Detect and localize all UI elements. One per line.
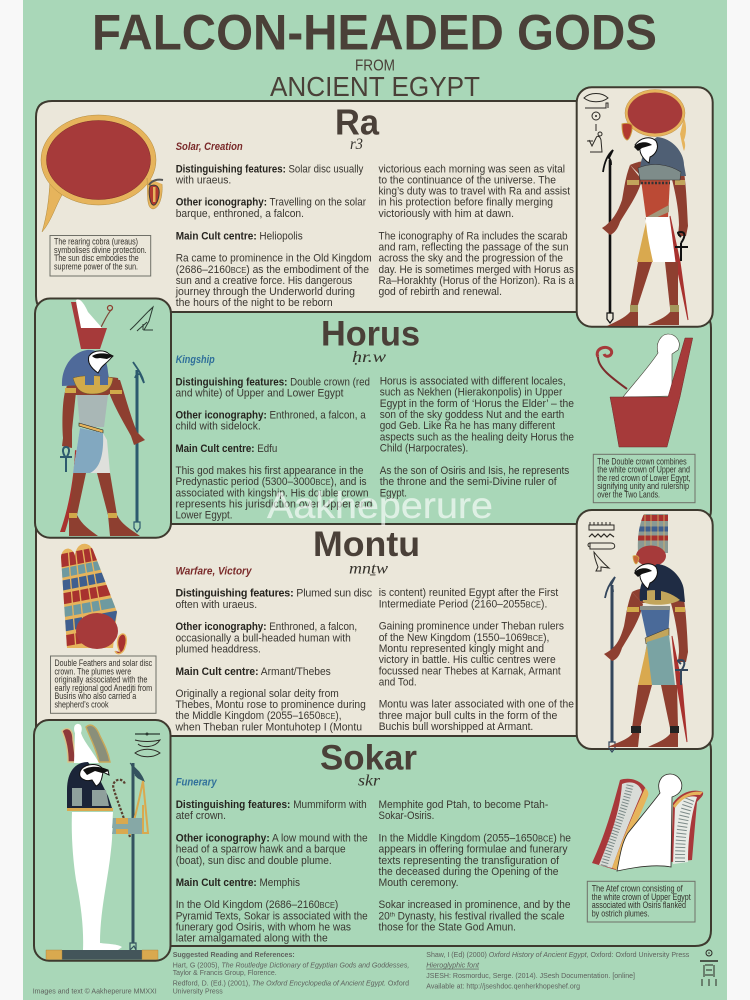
text: Montu left column: occasionally a bull-headed human with [176,632,351,644]
references: Redford, D. (Ed.) (2001), The Oxford Encyclopedia of Ancient Egypt. Oxford [173,979,409,988]
text: Ra left column: (2686–2160BCE) as the embodiment of the [176,264,369,276]
text: Sokar left column: Other iconography: A low mound with the [176,832,368,844]
tag: Kingship: Kingship [176,354,215,366]
references: Suggested Reading and References: [173,950,295,959]
text: Montu left column: often with uraeus. [176,599,257,611]
text: Ra right column: The iconography of Ra includes the scarab [378,230,568,242]
text: Horus right column [380,375,574,499]
title [92,4,657,102]
references: Hart, G (2005), The Routledge Dictionary of Egyptian Gods and Goddesses, [173,961,409,970]
tag: Funerary: Funerary [176,777,217,789]
text: Montu left column: Main Cult centre: Armant/Thebes [176,666,331,678]
hieroglyph: Horus falcon [130,307,153,331]
text: Sokar left column: (boat), sun disc and double plume. [176,855,332,867]
tag: Warfare, Victory: Warfare, Victory [176,565,252,577]
caption: Ra: The rearing cobra (ureaus) [54,237,138,247]
caption: Ra: symbolises divine protection. [54,245,147,255]
transliteration: Sokar: skr [358,773,381,790]
text: Ra right column [378,163,574,298]
text: Montu right column: victory in battle. His cultic centres were [379,654,556,666]
illustration: sun disc with uraeus [41,115,163,232]
text: Ra right column: and ram, reflecting the passage of the sun [378,242,569,254]
title: FALCON-HEADED GODS [92,4,657,60]
text: Sokar left column: funerary god Osiris, with whom he was [176,922,351,934]
illustration: atef crown [592,774,703,871]
figure: Montu [604,512,688,752]
caption: Ra: The sun disc embodies the [54,253,139,263]
text: Horus left column [176,376,373,522]
text: Montu right column: and Tod. [379,676,417,688]
caption: Ra: supreme power of the sun. [54,261,138,271]
references: Taylor & Francis Group, Florence. [173,968,277,977]
text: Montu right column: Montu was later associated with one of the [379,699,574,711]
text: Sokar left column: later amalgamated along with the [176,933,328,945]
text: Horus right column: son of the sky goddess Nut and the earth [380,409,564,421]
title: FROM [355,58,395,74]
text: Montu right column: Gaining prominence under Theban rulers [379,621,564,633]
transliteration: Ra: r3 [350,136,363,153]
text: Horus left column: represents his jurisdiction over Upper and [176,498,373,510]
text: Sokar left column: atef crown. [176,810,226,822]
text: Sokar right column: Sokar-Osiris. [378,810,434,822]
panel: Ra [36,101,600,312]
references: Shaw, I (Ed) (2000) Oxford History of Ancient Egypt, Oxford: Oxford University Press [426,950,690,959]
figure: Sokar [46,724,158,960]
text: Montu left column: Other iconography: Enthroned, a falcon, [176,621,357,633]
caption: Montu: Double Feathers and solar disc [54,658,153,668]
caption: Horus: the white crown of Upper and [597,465,690,475]
text: Horus right column: As the son of Osiris and Isis, he represents [380,465,569,477]
text: Montu left column: plumed headdress. [176,644,261,656]
figure: Horus [60,299,145,536]
text: Horus left column: This god makes his first appearance in the [176,465,364,477]
caption: Horus: the red crown of Lower Egypt, [597,473,691,483]
text: Ra right column: victorious each morning was seen as vital [378,163,565,175]
text: Sokar right column: those for the State God Amun. [378,922,516,934]
text: Sokar right column: In the Middle Kingdom (2055–1650BCE) he [378,832,571,844]
card: Sokar figure [34,720,170,961]
text: Sokar right column: Mouth ceremony. [378,877,458,889]
caption: Montu: originally associated with the [54,675,148,685]
text: Horus right column: Egypt. [380,487,407,499]
text: Horus right column: such as Nekhen (Hierakonpolis) in Upper [380,387,563,399]
text: Montu left column [175,588,373,733]
text: Horus right column: Horus is associated with different locales, [380,375,566,387]
panel: Sokar [100,736,711,946]
caption: Montu: early regional god Anedjti from [54,683,152,693]
text: Ra left column: the hours of the night to be reborn [176,297,333,309]
caption: Sokar: The Atef crown consisting of [592,884,683,894]
references: JSESH: Rosmorduc, Serge. (2014). JSesh Documentation. [online] [426,971,635,980]
text: Ra right column: god of rebirth and renewal. [378,286,502,298]
text: Ra left column: journey through the Underworld during [175,286,355,298]
text: Montu right column: Buchis bull worshipped at Armant. [379,721,533,733]
text: Horus left column: Lower Egypt. [176,510,232,522]
text: Sokar left column: Main Cult centre: Memphis [176,877,300,889]
heading: Ra: Ra [335,102,380,142]
text: Ra left column: Main Cult centre: Heliopolis [176,230,303,242]
text: Ra left column: sun and a creative force. His dangerous [176,275,352,287]
text: Sokar right column: Dynasty, his festival rivalled the scale [395,910,565,922]
text: Montu right column: Intermediate Period (2160–2055BCE). [379,598,547,610]
card: Horus figure [35,298,171,538]
caption: Sokar: the white crown of Upper Egypt [592,892,691,902]
text: Sokar left column: head of a sparrow hawk and a barque [176,844,346,856]
text: Montu left column: Distinguishing features: Plumed sun disc [176,588,373,600]
text: Ra left column: Ra came to prominence in the Old Kingdom [176,253,372,265]
text: Sokar left column: Pyramid Texts, Sokar is associated with the [176,910,368,922]
text: Sokar right column: Memphite god Ptah, to become Ptah- [378,799,549,811]
transliteration: Horus: ḥr.w [352,349,386,366]
heading: Sokar: Sokar [320,738,417,778]
hieroglyphs: Sokar [135,732,160,757]
text: Ra left column [175,163,372,309]
text: Montu right column: is content) reunited Egypt after the First [379,587,558,599]
text: Ra right column: to the continuance of the universe. The [378,174,556,186]
text: Montu right column [379,587,574,733]
text: Horus right column: the throne and the semi-Divine ruler of [380,476,557,488]
caption: Montu: shepherd’s crook [54,700,109,710]
hieroglyphs: Ra [584,94,608,152]
watermark: Aakheperure [267,485,493,526]
illustration: double crown [597,334,693,447]
text: Ra right column: king’s duty was to travel with Ra and assist [378,186,570,198]
text: Montu right column: three major bull cults in the form of the [379,710,557,722]
caption: Montu: Busiris who also carried a [54,691,136,701]
text: Horus right column: Egypt in the form of ‘Horus the Elder’ – the [380,398,574,410]
caption: Montu: crown. The plumes were [54,666,131,676]
text: Sokar right column [378,799,571,934]
text: Ra left column: Other iconography: Travelling on the solar [176,197,366,209]
text: Horus left column: child with sidelock. [176,421,261,433]
text: Horus left column: associated with kingship. His double crown [176,487,369,499]
text: Montu right column: Montu represented kingly might and [379,643,544,655]
copyright: Images and text © Aakheperure MMXXI [33,986,157,995]
text: Montu left column: Thebes, Montu rose to prominence during [176,699,366,711]
title: ANCIENT EGYPT [270,71,480,102]
text: Horus left column: Other iconography: Enthroned, a falcon, a [176,410,366,422]
text: Ra right column: across the sky and the progression of the [378,253,563,265]
caption: Horus: signifying unity and rulership [597,481,689,491]
transliteration: Montu: mnṯw [349,560,388,578]
text: Sokar left column: In the Old Kingdom (2686–2160BCE) [176,899,338,911]
text: Sokar right column: texts representing the transfiguration of [378,855,559,867]
text: Montu left column: when Theban ruler Montuhotep I (Montu [175,721,362,733]
text: Ra right column: victoriously with him at dawn. [378,208,514,220]
caption: Horus [593,454,695,503]
card: Ra figure [577,87,713,327]
caption: Ra [50,236,151,276]
text: Sokar right column: appears in offering formulae and funerary [378,844,568,856]
caption: Sokar: by ostrich plumes. [592,908,649,918]
heading: Montu: Montu [313,525,420,564]
references [173,950,690,995]
references: University Press [173,986,223,995]
text: Ra right column: day. He is sometimes merged with Horus as [378,264,574,276]
text: Horus left column: Distinguishing features: Double crown (red [176,376,370,388]
text: Horus right column: Child (Harpocrates). [380,443,468,455]
text: Ra left column: Distinguishing features: Solar disc usually [176,163,364,175]
caption: Horus: over the Two Lands. [597,489,660,499]
panel: Montu [36,524,600,736]
text: Montu left column: the Middle Kingdom (2055–1650BCE), [176,710,342,722]
text: Horus left column: and white) of Upper and Lower Egypt [176,388,344,400]
text: Ra right column: Ra–Horakhty (Horus of the Horizon). Ra is a [378,275,574,287]
text: Sokar right column: 20 [378,910,390,922]
caption: Horus: The Double crown combines [597,456,687,466]
caption: Sokar [587,881,695,922]
icon: name cartouche hieroglyphs [700,950,718,986]
text: Ra right column: in his protection before finally merging [378,197,553,209]
text: Montu right column: of the New Kingdom (1550–1069BCE), [379,632,549,644]
illustration: double feathers and solar disc [55,544,126,654]
text: Horus left column: Main Cult centre: Edfu [176,443,277,455]
heading: Horus: Horus [321,314,420,354]
text: Sokar right column: Sokar increased in prominence, and by the [378,899,571,911]
text: Ra left column: with uraeus. [175,174,231,186]
card: Montu figure [577,510,713,752]
figure: Ra [602,90,688,326]
text: Sokar left column: Distinguishing features: Mummiform with [176,799,367,811]
text: Sokar right column: th [390,911,395,918]
text: Horus left column: Predynastic period (5300–3000BCE), and is [176,476,367,488]
panel: Horus [100,312,711,524]
caption: Sokar: associated with Osiris flanked [592,900,686,910]
text: Ra left column: barque, enthroned, a falcon. [176,208,304,220]
references: Available at: http://jseshdoc.qenherkhopeshef.org [426,982,580,991]
references: Hieroglyphic font [426,961,480,970]
caption: Montu [50,656,156,713]
hieroglyphs: Montu [588,522,615,571]
text: Montu right column: focussed near Thebes at Karnak, Armant [379,665,561,677]
text: Horus right column: aspects such as the healing deity Horus the [380,431,574,443]
text: Sokar left column [176,799,368,945]
text: Sokar right column: the deceased during the Opening of the [378,866,559,878]
text: Montu left column: Originally a regional solar deity from [176,688,339,700]
tag: Solar, Creation: Solar, Creation [176,141,243,153]
text: Horus right column: god Geb. Like Ra he has many different [380,420,555,432]
